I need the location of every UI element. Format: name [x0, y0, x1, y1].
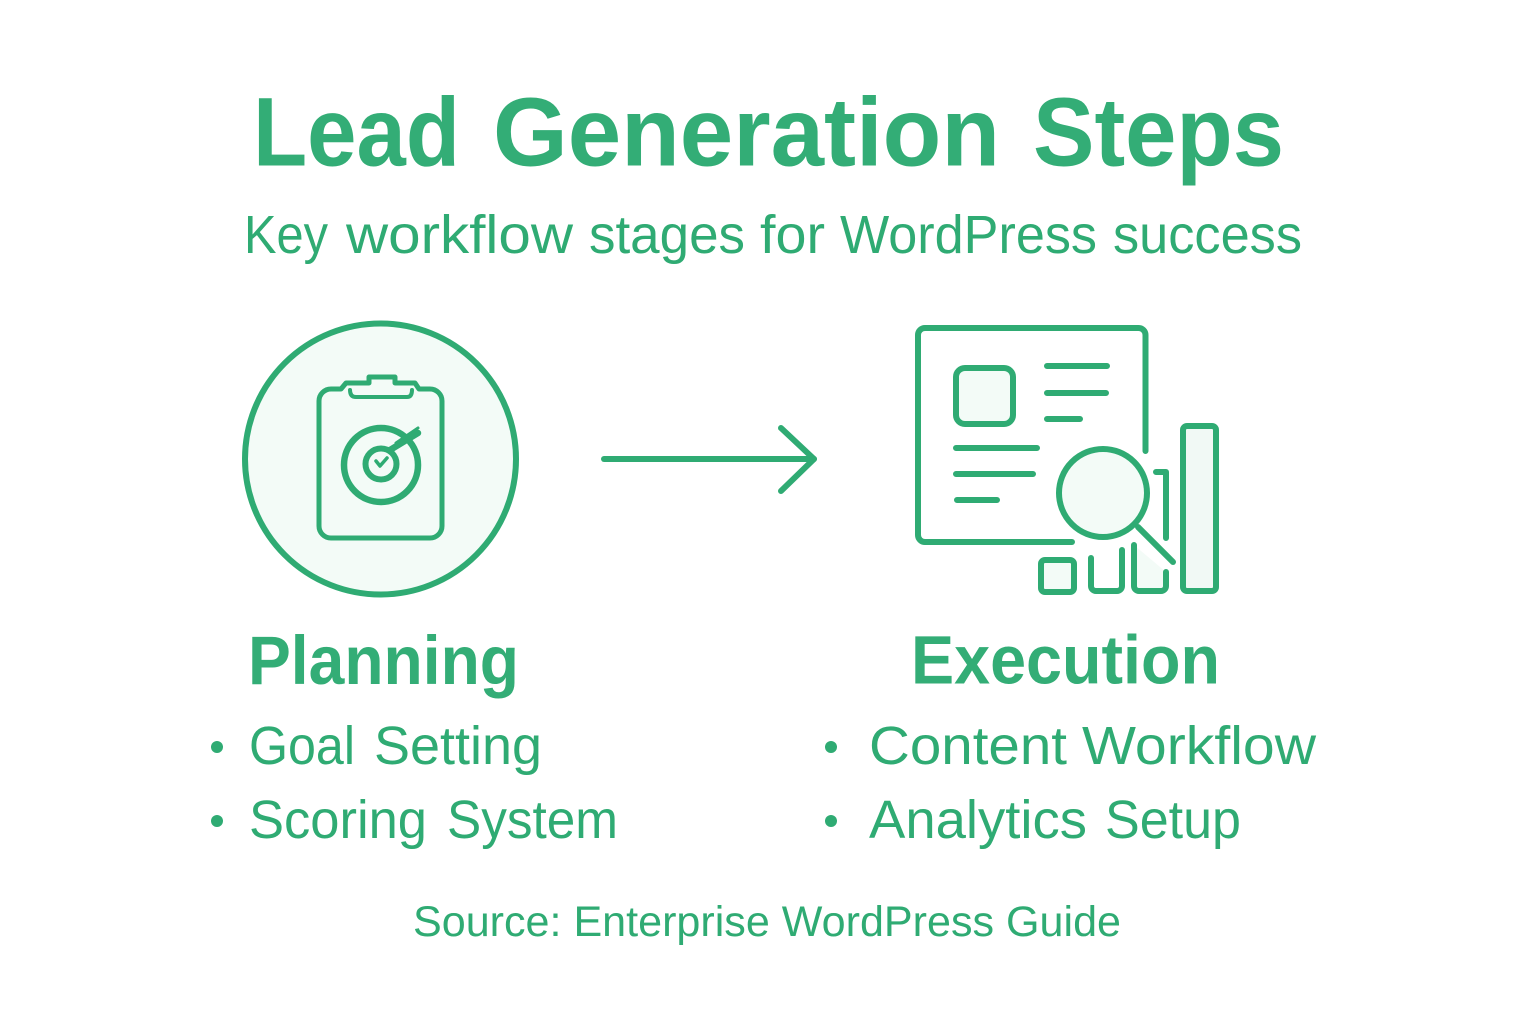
list: planning items	[211, 716, 618, 850]
title: Generation	[493, 78, 1000, 186]
list: execution items: Analytics	[869, 790, 1087, 850]
heading: Planning: Planning	[248, 622, 519, 699]
subtitle: for	[760, 205, 825, 265]
list: execution items: Setup	[1105, 790, 1241, 850]
bar chart	[1041, 426, 1216, 592]
subtitle: WordPress	[840, 205, 1097, 265]
list: planning items: System	[447, 790, 618, 850]
icon: planning clipboard with target	[245, 324, 516, 594]
arrow	[604, 428, 814, 491]
image placeholder	[956, 368, 1013, 424]
circle badge	[245, 324, 516, 594]
magnifier	[1059, 449, 1173, 562]
source note: Source: Enterprise WordPress Guide	[413, 898, 1121, 946]
list: planning items: Scoring	[249, 790, 427, 850]
subtitle: Key	[244, 205, 328, 265]
list: execution items	[825, 716, 1317, 850]
list: execution items: Content	[869, 716, 1067, 776]
text lines	[956, 366, 1107, 500]
icon: execution document with magnifier and bars	[918, 328, 1216, 592]
subtitle: stages	[589, 205, 745, 265]
list: planning items: Setting	[374, 716, 542, 776]
subtitle: workflow	[345, 205, 574, 265]
title: Steps	[1033, 78, 1284, 186]
title: Lead	[253, 78, 460, 186]
list: execution items: Workflow	[1082, 716, 1317, 776]
document	[918, 328, 1146, 542]
clipboard	[319, 377, 442, 538]
subtitle: success	[1113, 205, 1302, 265]
heading: Execution: Execution	[911, 622, 1220, 698]
list: planning items: Goal	[249, 716, 355, 776]
target	[344, 428, 418, 502]
